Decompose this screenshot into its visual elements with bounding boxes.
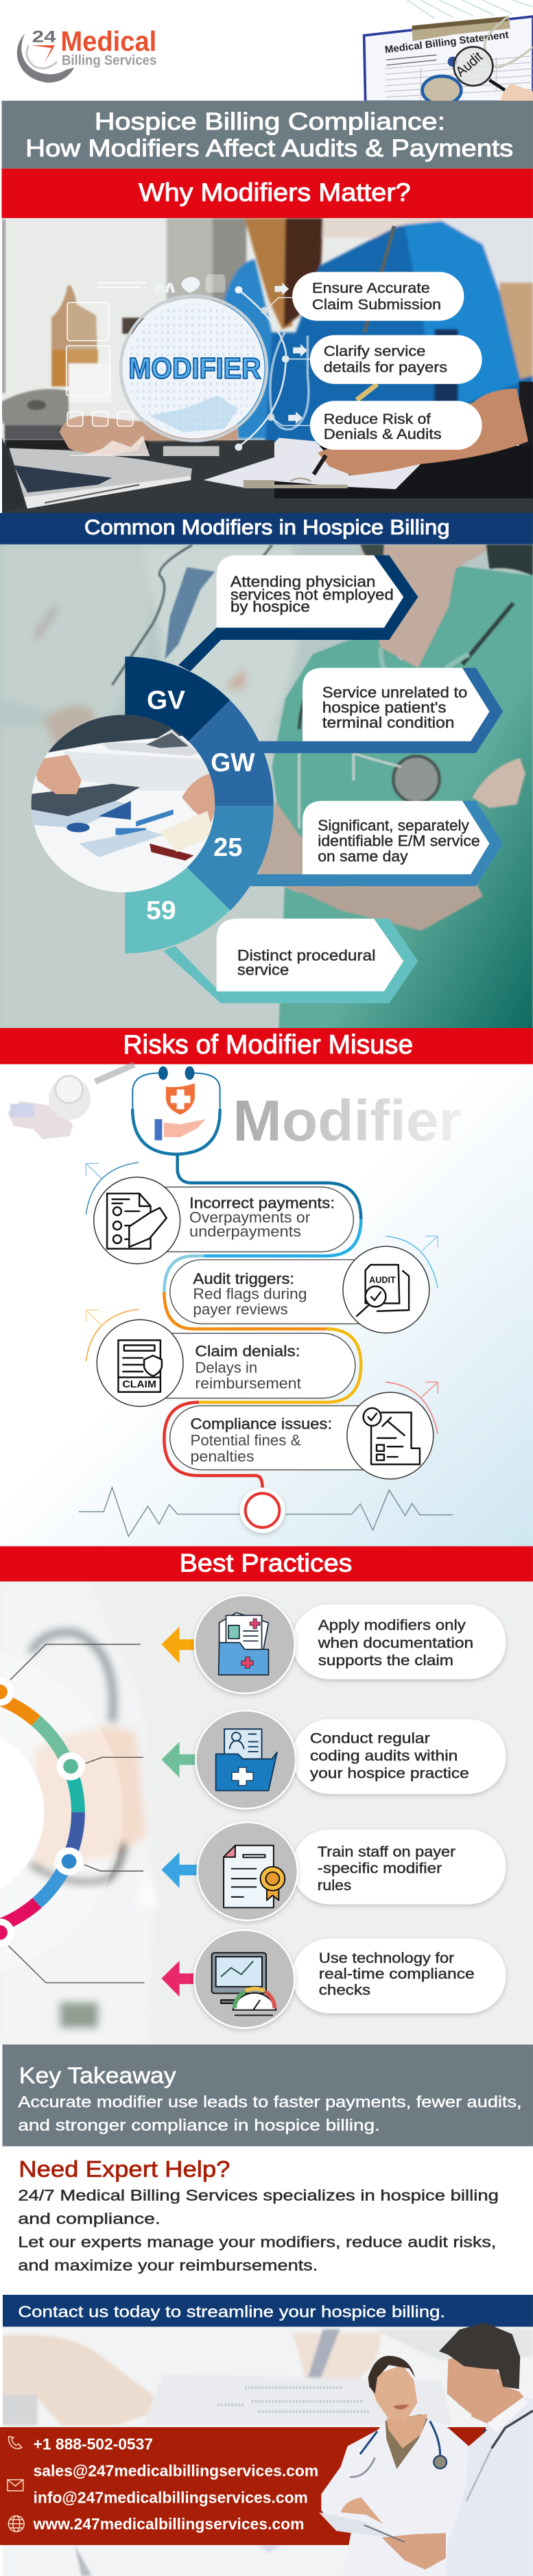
risk card: audit triggers: Audit triggers: [193, 1270, 294, 1287]
tag: 25 description: on same day [318, 848, 408, 865]
section: header and why modifiers matter [1, 101, 533, 456]
key takeaway panel: and stronger compliance in hospice billing. [18, 2116, 380, 2134]
header photo: billing statement clipboard [364, 0, 533, 104]
benefit pill: reduce risk: Reduce Risk of [324, 410, 431, 427]
practice 3: train staff: rules [318, 1876, 351, 1894]
tag: GV description: services not employed [230, 586, 394, 603]
modifier code wheel: GV [147, 685, 185, 714]
risk card: claim denials: CLAIM [122, 1379, 156, 1390]
practice 2: coding audits [161, 1710, 506, 1809]
heading: common modifiers: Common Modifiers in Hospice Billing [84, 515, 450, 539]
practice 4: use technology: Use technology for [319, 1949, 454, 1966]
benefit pill: reduce risk [310, 401, 482, 450]
modifier code wheel: 59 [146, 896, 176, 925]
risk card: compliance issues: Compliance issues: [190, 1415, 332, 1432]
benefit pill: clarify service details [310, 335, 482, 384]
front doctor [319, 2356, 469, 2576]
need expert help text: 24/7 Medical Billing Services specializes in hospice billing [18, 2187, 499, 2204]
modifier code wheel: GW [211, 748, 255, 777]
practice 1: apply modifiers: supports the claim [318, 1651, 453, 1669]
modifier code wheel [125, 656, 274, 953]
tag: GW description: Service unrelated to [322, 684, 467, 701]
practice 4: use technology: real-time compliance [319, 1965, 475, 1982]
contact details panel: +1 888-502-0537 [34, 2435, 153, 2453]
risk card: incorrect payments: Incorrect payments: [189, 1195, 335, 1212]
contact details panel: sales@247medicalbillingservices.com [34, 2462, 318, 2480]
risk card: audit triggers [170, 1236, 438, 1333]
tag: 25 description [246, 801, 503, 886]
icon: envelope [8, 2480, 23, 2491]
risk card: audit triggers: payer reviews [193, 1300, 288, 1317]
icon: patient folder [219, 1612, 268, 1675]
heading: risks of modifier misuse: Risks of Modifier Misuse [123, 1030, 413, 1060]
faded stethoscope and US map [8, 1064, 134, 1140]
practice 4: use technology: checks [319, 1981, 370, 1998]
photo circle: calculator and charts [31, 712, 217, 893]
key takeaway panel: Key Takeaway [19, 2063, 176, 2088]
risk card: compliance issues: Potential fines & [190, 1431, 301, 1448]
tag: GV description [178, 556, 418, 671]
tag: GW description: terminal condition [322, 714, 454, 731]
key takeaway panel [2, 2044, 533, 2146]
photo: doctor and nurse with teal tint [0, 545, 533, 1029]
practice 2: coding audits: coding audits within [310, 1747, 458, 1764]
section: common modifiers [0, 513, 533, 1029]
practice 2: coding audits: your hospice practice [310, 1765, 469, 1781]
key takeaway panel: Accurate modifier use leads to faster payments, fewer audits, [18, 2092, 522, 2110]
floating HUD graphics [67, 274, 311, 456]
section: takeaway and contact [0, 2044, 533, 2576]
benefit pill: accurate claim submission: Claim Submission [312, 296, 441, 313]
header photo: billing statement clipboard: Medical Billing Statement [384, 29, 510, 56]
practice 3: train staff: Train staff on payer [318, 1843, 455, 1860]
risk card: audit triggers: Red flags during [193, 1285, 307, 1302]
logo: Billing Services [62, 52, 156, 68]
heading: best practices: Best Practices [180, 1549, 352, 1577]
need expert help text: and compliance. [18, 2210, 161, 2228]
tag: GV description: by hospice [230, 598, 310, 615]
contact details panel: info@247medicalbillingservices.com [34, 2489, 308, 2507]
photo: faded hands with papers [0, 2327, 533, 2576]
risk card: compliance issues [170, 1382, 438, 1479]
logo [17, 25, 156, 83]
practice 3: train staff: -specific modifier [318, 1859, 442, 1876]
lower right of photo: arm, clipboard, desk [261, 382, 533, 514]
heading: best practices [0, 1547, 533, 1582]
section: risks of misuse [0, 1028, 533, 1549]
benefit pill: accurate claim submission [292, 272, 464, 321]
heading: why modifiers matter [1, 169, 533, 218]
header photo: billing statement clipboard: Audit [453, 49, 486, 80]
title band: How Modifiers Affect Audits & Payments [25, 135, 513, 162]
progress ring [0, 1645, 145, 1983]
tag: GW description [259, 668, 503, 753]
left of photo: wall objects, phone, laptop, hand [0, 219, 274, 514]
tag: 59 description: Distinct procedural [237, 947, 376, 964]
risk card: incorrect payments: underpayments [189, 1223, 301, 1240]
practice 1: apply modifiers: when documentation [318, 1634, 473, 1651]
modifier code wheel: 25 [213, 833, 242, 861]
need expert help text: Let our experts manage your modifiers, reduce audit risks, [18, 2233, 496, 2250]
tag: 25 description: Significant, separately [318, 817, 469, 834]
modifier circle: MODIFIER [128, 353, 261, 385]
risk card: compliance issues: penalties [190, 1448, 254, 1465]
icon: certificate [224, 1846, 285, 1907]
benefit pill: clarify service details: Clarify service [324, 342, 425, 359]
benefit pill: clarify service details: details for payers [324, 359, 447, 375]
tag: 59 description: service [237, 961, 289, 978]
practice 4: use technology [161, 1929, 506, 2029]
heading: why modifiers matter: Why Modifiers Matter? [139, 178, 411, 206]
risk card: claim denials [86, 1309, 355, 1407]
contact banner [3, 2295, 533, 2327]
practice 2: coding audits: Conduct regular [310, 1730, 430, 1746]
photo: blurred doctor background [0, 1582, 533, 2045]
benefit pill: accurate claim submission: Ensure Accurate [312, 279, 430, 296]
photo: two doctors [319, 2323, 533, 2576]
stethoscope logo icon [132, 1066, 220, 1154]
back doctor [439, 2323, 533, 2576]
icon: globe [8, 2516, 24, 2531]
risk card: incorrect payments: Overpayments or [189, 1208, 310, 1226]
section: best practices [0, 1547, 533, 2045]
contact details panel: www.247medicalbillingservices.com [33, 2515, 304, 2533]
need expert help text: Need Expert Help? [19, 2156, 230, 2182]
icon: medical record folder [216, 1729, 277, 1791]
risk card: incorrect payments [86, 1162, 353, 1264]
connecting path [164, 1155, 361, 1488]
title band: Hospice Billing Compliance: [95, 108, 445, 135]
tag: 59 description [163, 918, 418, 1003]
pulse line with red target [79, 1488, 453, 1536]
practice 1: apply modifiers: Apply modifiers only [318, 1617, 466, 1634]
risk card: audit triggers: AUDIT [369, 1274, 396, 1285]
practice 1: apply modifiers [161, 1595, 506, 1694]
contact details panel [0, 2427, 486, 2545]
heading: risks of modifier misuse [0, 1028, 533, 1064]
need expert help text [18, 2156, 499, 2274]
tag: GV description: Attending physician [230, 573, 376, 590]
title band [1, 101, 533, 169]
benefit pill: reduce risk: Denials & Audits [324, 425, 442, 442]
heading: common modifiers [0, 513, 533, 545]
contact banner: Contact us today to streamline your hospice billing. [18, 2302, 445, 2321]
risk card: claim denials: Delays in [195, 1359, 257, 1376]
watermark word: modifier: Modifier [233, 1088, 462, 1153]
logo: 24 [32, 28, 57, 47]
icon: phone [8, 2437, 22, 2448]
risk card: claim denials: Claim denials: [195, 1342, 300, 1359]
photo: nurse at desk with laptop [0, 218, 533, 514]
background gradient [0, 1064, 533, 1549]
tag: 25 description: identifiable E/M service [318, 832, 480, 849]
logo: Medical [60, 25, 156, 57]
need expert help text: and maximize your reimbursements. [18, 2256, 318, 2274]
practice 3: train staff [161, 1822, 506, 1921]
modifier circle [121, 296, 267, 441]
icon: monitor with gauge [212, 1953, 276, 2015]
tag: GW description: hospice patient's [322, 699, 447, 716]
risk card: claim denials: reimbursement [195, 1375, 301, 1392]
